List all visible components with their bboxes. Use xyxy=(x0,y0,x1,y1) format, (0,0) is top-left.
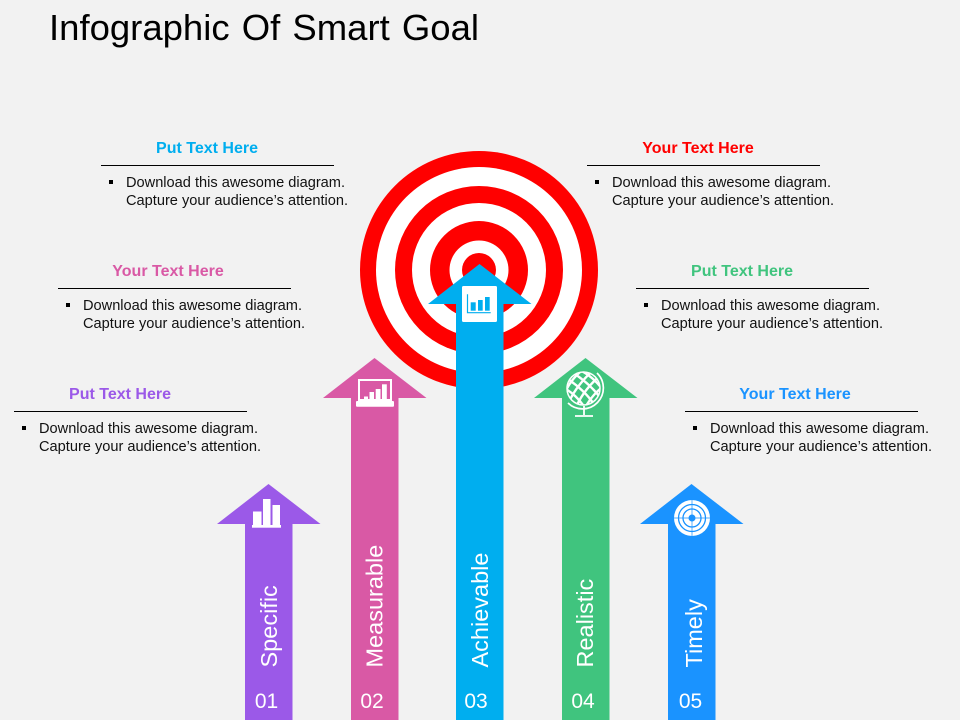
text block: middle right: Capture your audience’s attention. xyxy=(661,316,883,332)
text block: top right: Capture your audience’s attention. xyxy=(612,193,834,209)
text block: top left: Download this awesome diagram. xyxy=(126,175,345,191)
arrow 01: Specific xyxy=(217,484,320,720)
text block: lower right: Download this awesome diagram. xyxy=(710,421,929,437)
arrow 04: Realistic: 04 xyxy=(571,690,595,713)
arrow 05: Timely: Timely xyxy=(681,599,707,668)
text block: middle left: Download this awesome diagram. xyxy=(83,298,302,314)
bullseye target xyxy=(360,151,598,389)
text block: lower left xyxy=(14,386,261,455)
icon: target xyxy=(674,500,710,536)
arrow 05: Timely xyxy=(640,484,744,720)
text block: middle right: Put Text Here xyxy=(691,263,793,280)
icon: globe xyxy=(564,368,604,416)
arrow 04: Realistic: Realistic xyxy=(572,578,598,668)
text block: middle left xyxy=(58,263,305,332)
arrow 03: Achievable: 03 xyxy=(464,690,488,713)
arrow 05: Timely: 05 xyxy=(679,690,702,713)
text block: top right: Your Text Here xyxy=(642,140,754,157)
text block: lower left: Put Text Here xyxy=(69,386,171,403)
arrow 01: Specific: 01 xyxy=(255,690,278,713)
text block: top left xyxy=(101,140,348,209)
icon: chart tile xyxy=(462,286,497,322)
arrow 02: Measurable xyxy=(323,358,426,720)
text block: top right xyxy=(587,140,834,209)
arrow 03: Achievable: Achievable xyxy=(467,553,493,668)
text block: middle right xyxy=(636,263,883,332)
arrow 02: Measurable: Measurable xyxy=(362,545,388,668)
icon: laptop with chart xyxy=(356,380,394,407)
arrow 04: Realistic xyxy=(534,358,638,720)
text block: lower right xyxy=(685,386,932,455)
title: Infographic Of Smart Goal xyxy=(49,7,479,48)
text block: middle right: Download this awesome diagram. xyxy=(661,298,880,314)
text block: middle left: Capture your audience’s attention. xyxy=(83,316,305,332)
text block: top right: Download this awesome diagram. xyxy=(612,175,831,191)
text block: lower right: Your Text Here xyxy=(739,386,851,403)
text block: top left: Capture your audience’s attention. xyxy=(126,193,348,209)
text block: lower left: Download this awesome diagram. xyxy=(39,421,258,437)
arrow 03: Achievable xyxy=(428,264,532,720)
text block: lower right: Capture your audience’s attention. xyxy=(710,439,932,455)
icon: bar chart xyxy=(252,499,281,528)
arrow 02: Measurable: 02 xyxy=(360,690,384,713)
text block: lower left: Capture your audience’s attention. xyxy=(39,439,261,455)
text block: middle left: Your Text Here xyxy=(112,263,224,280)
arrow 01: Specific: Specific xyxy=(256,585,282,668)
text block: top left: Put Text Here xyxy=(156,140,258,157)
